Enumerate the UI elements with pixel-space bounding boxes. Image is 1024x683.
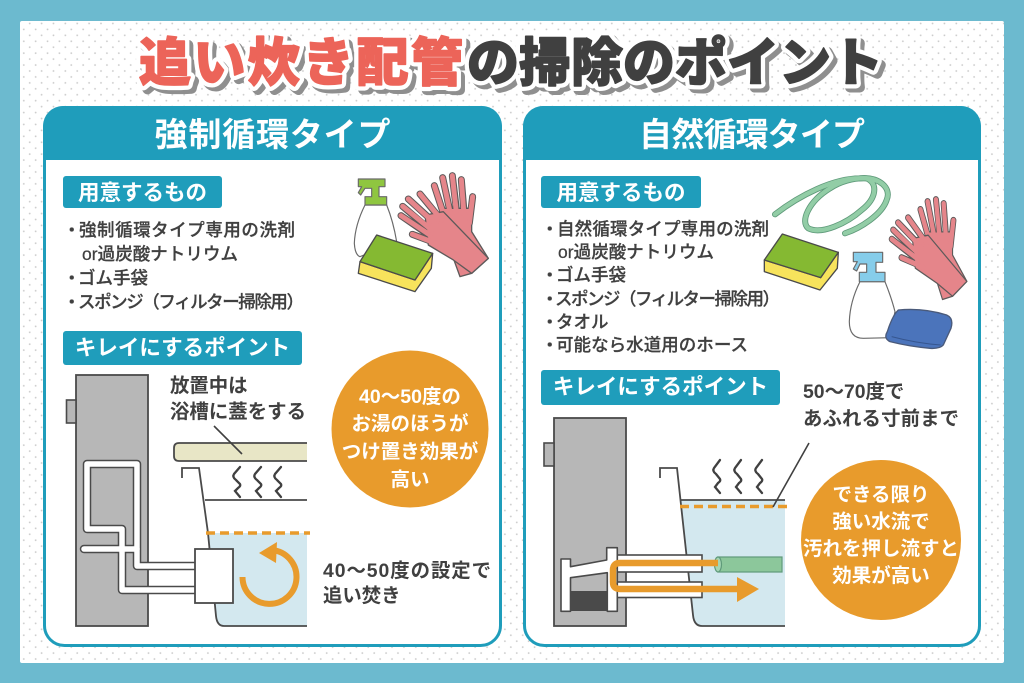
- callout: water flow: 汚れを押し流すと: [803, 538, 959, 560]
- label: cleaning points: キレイにするポイント: [75, 336, 290, 360]
- list: things to prepare: 自然循環タイプ専用の洗剤: [557, 219, 769, 239]
- list: things to prepare: [541, 219, 780, 355]
- list: things to prepare: ・: [541, 219, 558, 239]
- title: 追い炊き配管: [139, 35, 463, 93]
- list: things to prepare: 強制循環タイプ専用の洗剤: [79, 220, 295, 240]
- list: things to prepare: ・: [541, 312, 558, 332]
- label: things to prepare: [63, 176, 222, 208]
- label: things to prepare: [541, 176, 701, 208]
- list: things to prepare: ゴム手袋: [556, 265, 626, 285]
- label: cleaning points: キレイにするポイント: [553, 375, 768, 399]
- label: things to prepare: 用意するもの: [556, 181, 686, 205]
- list: things to prepare: ・: [541, 335, 558, 355]
- diagram: natural circulation bath: [544, 418, 809, 626]
- icon: steam: [713, 460, 762, 493]
- list: things to prepare: ・: [63, 220, 80, 240]
- gloves: [892, 200, 967, 300]
- list: things to prepare: ・: [541, 265, 558, 285]
- callout: temperature: つけ置き効果が: [342, 440, 479, 463]
- callout: water flow: できる限り: [832, 484, 930, 506]
- pipes: [84, 464, 195, 590]
- label: things to prepare: 用意するもの: [78, 181, 207, 205]
- hose: [775, 178, 888, 233]
- flow arrow: [613, 563, 759, 602]
- water level line: [206, 531, 310, 535]
- icon: steam: [233, 467, 281, 497]
- annotation: reheat setting: 40〜50度の設定で: [323, 560, 491, 582]
- bathtub outline: [182, 468, 307, 626]
- title: [139, 35, 887, 97]
- annotation: cover the tub: 放置中は: [170, 375, 248, 397]
- bath lid: [174, 443, 307, 461]
- title: の掃除のポイント: [471, 39, 887, 97]
- water: [681, 500, 785, 626]
- list: things to prepare: 可能なら水道用のホース: [556, 335, 748, 355]
- water level line: [680, 505, 787, 508]
- dark water block: [570, 591, 608, 611]
- list: things to prepare: or過炭酸ナトリウム: [82, 244, 238, 264]
- annotation: water temperature: [803, 381, 959, 430]
- list: things to prepare: ・: [541, 289, 558, 309]
- sponge, bottle, towel: [764, 234, 952, 348]
- callout: water flow: 効果が高い: [832, 564, 930, 587]
- list: things to prepare: ・: [63, 268, 80, 288]
- title: 追い炊き配管: [143, 39, 467, 97]
- label: cleaning points: [541, 370, 780, 405]
- water: [208, 533, 307, 626]
- pipes: [561, 548, 702, 611]
- list: things to prepare: or過炭酸ナトリウム: [558, 242, 714, 262]
- circular arrow: [242, 542, 296, 604]
- hose in water: [714, 557, 782, 572]
- pointer line: [773, 443, 809, 507]
- pointer line: [214, 426, 242, 454]
- list: things to prepare: スポンジ（フィルター掃除用）: [555, 289, 780, 309]
- list: things to prepare: [63, 220, 304, 312]
- hot water tank: [554, 418, 626, 626]
- annotation: water temperature: 50〜70度で: [803, 381, 904, 403]
- callout: temperature: お湯のほうが: [351, 412, 469, 435]
- list: things to prepare: タオル: [556, 312, 608, 332]
- list: things to prepare: ・: [63, 292, 80, 312]
- annotation: reheat setting: 追い焚き: [323, 585, 401, 607]
- list: things to prepare: ゴム手袋: [78, 268, 148, 288]
- title: の掃除のポイント: [467, 35, 883, 93]
- label: cleaning points: [63, 331, 302, 365]
- panel header: [43, 106, 502, 160]
- annotation: water temperature: あふれる寸前まで: [803, 408, 959, 430]
- annotation: cover the tub: 浴槽に蓋をする: [170, 401, 306, 423]
- list: things to prepare: スポンジ（フィルター掃除用）: [78, 292, 304, 312]
- hot water tank: [76, 375, 148, 626]
- panel header: [523, 106, 981, 160]
- panel: natural circulation type: [523, 106, 981, 646]
- bathtub outline: [660, 468, 785, 626]
- callout: water flow: [801, 460, 961, 620]
- pump box: [195, 549, 233, 603]
- diagram: forced circulation bath: [66, 375, 310, 626]
- callout: temperature: [332, 350, 488, 508]
- icon: spray bottle, sponge and gloves: [354, 176, 488, 292]
- callout: temperature: 40〜50度の: [359, 386, 461, 408]
- callout: water flow: 強い水流で: [832, 511, 930, 533]
- panel: forced circulation type: [43, 106, 502, 646]
- annotation: reheat setting: [323, 560, 491, 607]
- panel header: 強制循環タイプ: [154, 116, 390, 153]
- annotation: cover the tub: [170, 375, 306, 423]
- panel header: 自然循環タイプ: [639, 116, 865, 153]
- icon: hose, sponge, spray bottle, towel and gloves: [764, 178, 967, 348]
- title: 追い炊き配管: [139, 35, 463, 93]
- callout: temperature: 高い: [390, 468, 430, 491]
- title: の掃除のポイント: [467, 35, 883, 93]
